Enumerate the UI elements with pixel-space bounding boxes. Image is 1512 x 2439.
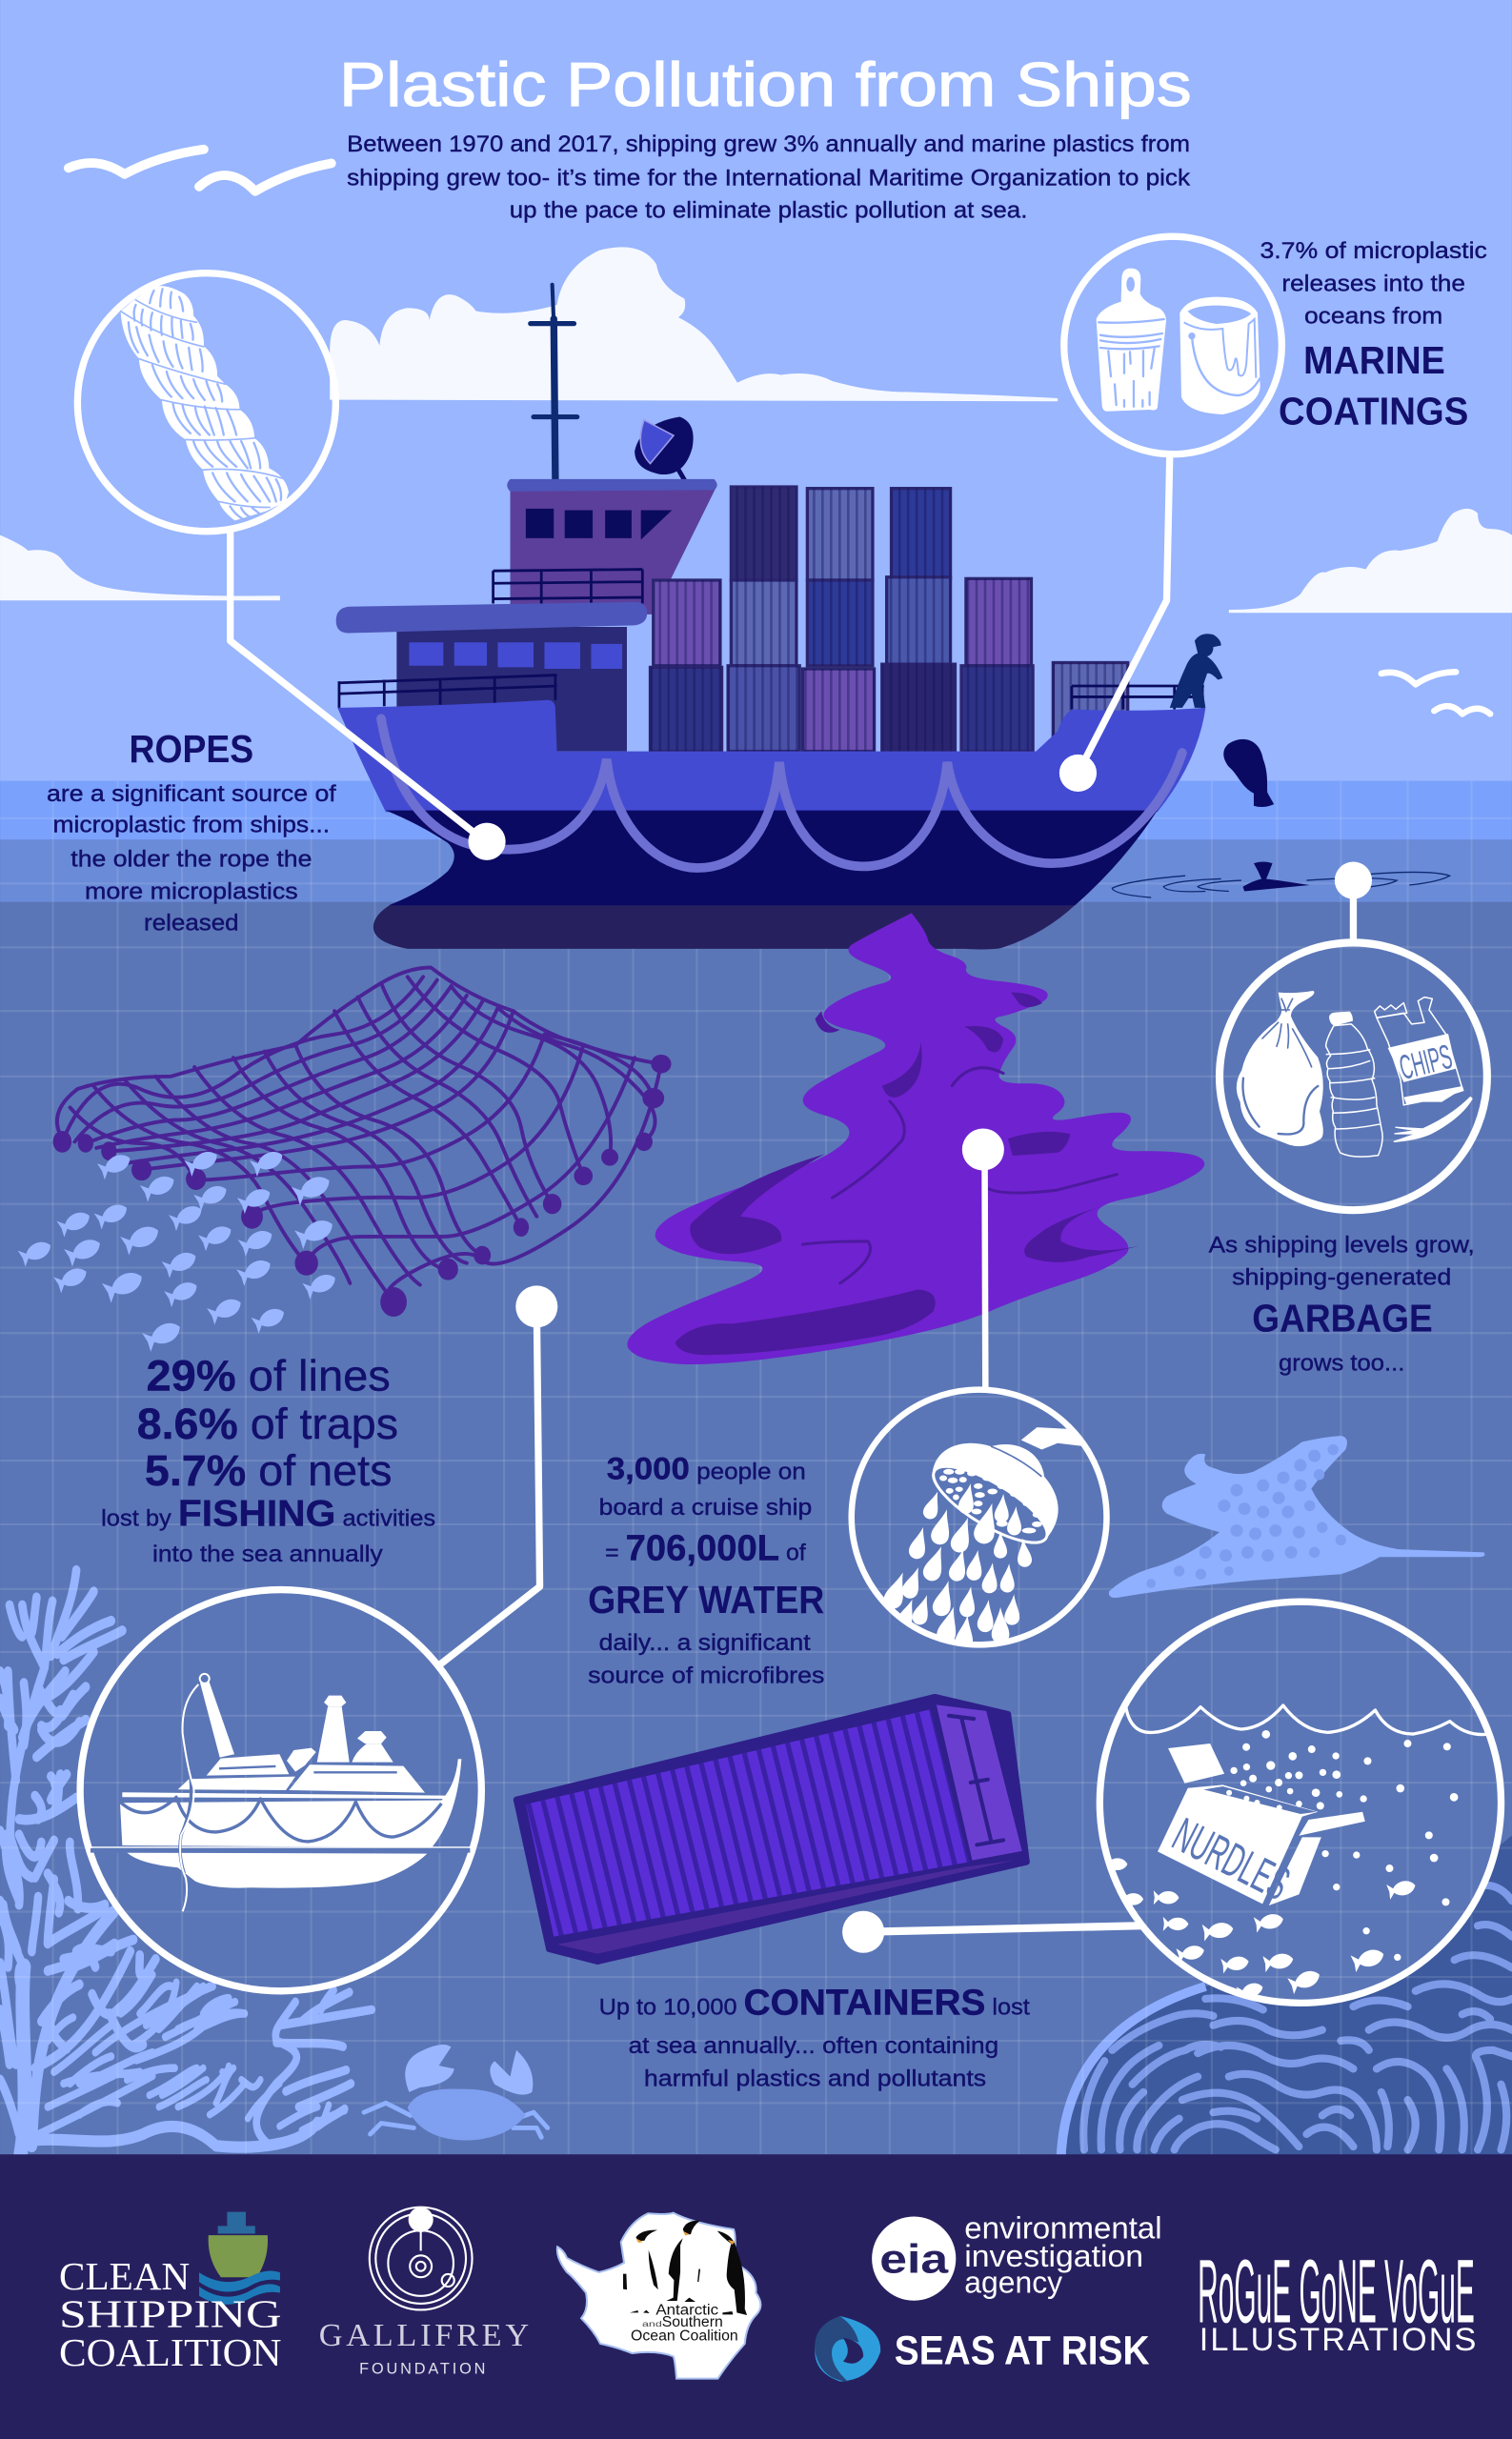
logo: antarctic and southern ocean coalition: Southern <box>662 2314 723 2330</box>
logo: gallifrey foundation: GALLIFREY <box>319 2317 529 2353</box>
icon: bag bottle chips fork: CHIPS <box>1396 1037 1456 1087</box>
fender rope <box>381 718 1182 868</box>
text: garbage: GARBAGE <box>1252 1297 1433 1340</box>
callout: fishing <box>80 1285 557 1991</box>
text: marine coatings: releases into the <box>1281 271 1465 296</box>
submerged hull <box>373 904 1077 949</box>
bow railing <box>1072 686 1204 709</box>
connector: fishing <box>440 1306 540 1664</box>
whale fluke jumping <box>1223 739 1274 807</box>
text: containers: at sea annually... often containing <box>629 2033 998 2059</box>
logo: antarctic and southern ocean coalition: and <box>642 2319 662 2328</box>
logo: gallifrey foundation: FOUNDATION <box>359 2360 485 2377</box>
logo: clean shipping coalition: CLEAN <box>59 2255 190 2298</box>
connector: grey water <box>983 1148 987 1389</box>
logo: environmental investigation agency: eia <box>879 2236 949 2281</box>
icon: rope <box>121 286 289 520</box>
text: ropes: microplastic from ships... <box>53 812 330 837</box>
mast <box>531 285 577 479</box>
connector: garbage <box>1351 880 1356 942</box>
intro text: up the pace to eliminate plastic pollution at sea. <box>510 198 1027 224</box>
coral tree <box>0 1570 372 2153</box>
logo: environmental investigation agency: environmental <box>964 2209 1162 2245</box>
logo: antarctic and southern ocean coalition: Ocean Coalition <box>631 2328 738 2345</box>
text: fishing losses: lost by FISHING activities <box>101 1494 435 1535</box>
lower cabin <box>336 602 647 752</box>
logo: seas at risk: SEAS AT RISK <box>895 2328 1150 2373</box>
upper hull <box>337 700 1205 812</box>
text: ropes: released <box>144 910 239 936</box>
water grid <box>0 781 1512 2154</box>
text: fishing losses <box>101 1352 435 1567</box>
text: grey water <box>588 1451 824 1689</box>
logo: clean shipping coalition: COALITION <box>59 2331 282 2374</box>
crew member <box>1170 634 1222 708</box>
cabin railing <box>339 675 557 708</box>
text: fishing losses: into the sea annually <box>152 1542 383 1567</box>
text: ropes: the older the rope the <box>71 846 312 872</box>
crab <box>364 2045 548 2141</box>
text: fishing losses: 5.7% of nets <box>145 1446 392 1495</box>
icon: paint brush and can <box>1097 269 1260 414</box>
logo: clean shipping coalition: SHIPPING <box>59 2292 282 2335</box>
logo: environmental investigation agency: agency <box>964 2265 1063 2300</box>
circle backgrounds over coral <box>81 1590 1502 2002</box>
text: grey water: = 706,000L of <box>605 1528 806 1568</box>
ship <box>336 285 1222 949</box>
container door bars <box>949 1716 1003 1844</box>
text: containers: Up to 10,000 CONTAINERS lost <box>599 1982 1030 2022</box>
connector: marine coatings <box>1078 454 1170 773</box>
text: garbage <box>1209 1232 1475 1376</box>
cloud: centre <box>330 247 1058 401</box>
callout: ropes <box>77 273 506 860</box>
tower railing <box>494 570 642 603</box>
connector: containers <box>863 1925 1143 1932</box>
cloud: right <box>1229 509 1512 613</box>
intro text: Between 1970 and 2017, shipping grew 3% annually and marine plastics from <box>347 131 1190 157</box>
sea background bands <box>0 781 1512 2162</box>
logo: gallifrey foundation <box>319 2207 529 2377</box>
text: marine coatings: 3.7% of microplastic <box>1260 238 1487 264</box>
logo: antarctic and southern ocean coalition: Antarctic <box>655 2302 718 2318</box>
sunken shipping container <box>516 1697 1027 1962</box>
text: marine coatings: MARINE <box>1303 338 1445 382</box>
text: ropes: ROPES <box>130 727 253 771</box>
logo: environmental investigation agency: investigation <box>964 2238 1143 2273</box>
icon: fishing ship <box>91 1674 470 1911</box>
intro text <box>347 131 1191 224</box>
logo: environmental investigation agency <box>872 2209 1162 2301</box>
text: grey water: 3,000 people on <box>607 1451 806 1486</box>
callout: marine coatings <box>1059 236 1281 792</box>
callout: nurdles <box>842 1602 1502 2003</box>
callout: garbage <box>1220 861 1487 1210</box>
school of fish <box>18 1147 339 1352</box>
text: marine coatings <box>1260 238 1487 433</box>
sky background <box>0 0 1512 782</box>
text: fishing losses: 8.6% of traps <box>137 1400 398 1448</box>
whale tail and ripples <box>1112 861 1450 897</box>
satellite dish <box>635 417 694 485</box>
ghost fishing net <box>53 968 672 1317</box>
footer band <box>0 2154 1512 2439</box>
text: fishing losses: 29% of lines <box>147 1352 391 1401</box>
text: ropes: are a significant source of <box>47 781 336 807</box>
cloud: left <box>0 535 280 600</box>
callout: grey water <box>852 1128 1107 1652</box>
text: containers <box>599 1982 1030 2091</box>
text: ropes: more microplastics <box>85 879 298 905</box>
icon: nurdles box <box>1103 1705 1489 2001</box>
text: garbage: grows too... <box>1279 1350 1404 1376</box>
text: garbage: shipping-generated <box>1232 1265 1451 1291</box>
text: garbage: As shipping levels grow, <box>1209 1232 1475 1258</box>
oil or grey water slick <box>627 913 1204 1364</box>
lower hull <box>386 811 1158 905</box>
bridge tower <box>507 479 717 615</box>
icon: bag bottle chips fork <box>1237 991 1472 1157</box>
intro text: shipping grew too- it’s time for the International Maritime Organization to pick <box>347 165 1191 191</box>
logo: rogue gone vogue illustrations: ILLUSTRATIONS <box>1200 2322 1476 2358</box>
icon: shower head <box>881 1427 1084 1652</box>
text: grey water: board a cruise ship <box>599 1495 812 1521</box>
text: grey water: daily... a significant <box>599 1630 811 1656</box>
birds <box>69 150 1490 714</box>
text: grey water: GREY WATER <box>588 1578 824 1622</box>
icon: nurdles box: NURDLES <box>1164 1807 1298 1910</box>
logo: clean shipping coalition <box>59 2212 282 2374</box>
text: grey water: source of microfibres <box>588 1663 824 1689</box>
text: ropes <box>47 727 336 936</box>
text: marine coatings: COATINGS <box>1279 390 1468 433</box>
brain coral <box>1058 1836 1512 2162</box>
logo: antarctic and southern ocean coalition <box>557 2213 760 2379</box>
manta ray <box>1109 1436 1484 1598</box>
text: containers: harmful plastics and pollutants <box>644 2066 986 2091</box>
logo: seas at risk <box>815 2316 1150 2382</box>
text: marine coatings: oceans from <box>1304 304 1442 330</box>
title: Plastic Pollution from Ships <box>339 50 1192 119</box>
connector: ropes <box>231 531 485 841</box>
containers <box>650 487 1128 752</box>
